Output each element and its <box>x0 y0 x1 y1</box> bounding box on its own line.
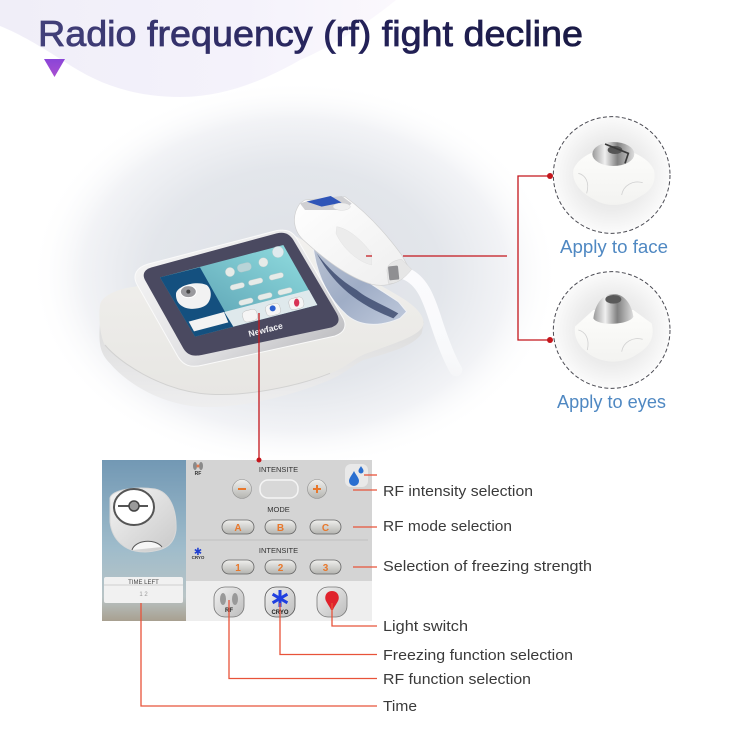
eyes head metal cone <box>593 294 633 324</box>
brand name: Newface <box>247 321 284 339</box>
cable <box>405 273 456 370</box>
leader line: screen to panel <box>258 313 260 460</box>
RF indicator icon <box>193 462 203 477</box>
label: light switch: Light switch <box>383 618 468 635</box>
face head circle <box>553 117 670 233</box>
cradle dark groove <box>317 253 398 318</box>
button: minus <box>232 480 252 498</box>
strength buttons: 2 <box>278 563 284 574</box>
time left box: 1 2 <box>139 592 148 598</box>
heading: intensite: INTENSITE <box>259 465 298 474</box>
button: plus <box>308 480 326 498</box>
panel: eyes head <box>553 272 670 388</box>
strength buttons <box>222 560 341 574</box>
button: RF function <box>214 587 244 617</box>
button: cryo function <box>265 587 295 617</box>
screen buttons <box>225 246 293 306</box>
label: RF intensity selection: RF intensity selection <box>383 483 533 500</box>
connector dot: face head <box>547 173 553 179</box>
heading: mode: MODE <box>267 505 290 514</box>
screen time box <box>189 312 228 331</box>
label: apply to face: Apply to face <box>560 237 668 257</box>
callout labels <box>383 483 592 715</box>
control screen bezel <box>135 230 345 366</box>
red dot on panel <box>256 458 262 462</box>
screen dark frame <box>144 233 339 356</box>
face head metal cap <box>592 142 634 166</box>
RF indicator icon: RF <box>195 471 201 477</box>
mode buttons: B <box>277 523 284 534</box>
screen head image <box>176 283 211 309</box>
face head body <box>573 148 655 205</box>
intensity display <box>260 480 298 498</box>
time left box <box>104 577 183 603</box>
panel: enlarged control screen <box>102 460 372 621</box>
eyes head circle <box>553 272 670 388</box>
background soft device shadow <box>30 80 560 470</box>
mode buttons: A <box>234 523 242 534</box>
screen left image area <box>102 460 186 621</box>
face head seams <box>578 173 643 195</box>
strength buttons: 3 <box>323 563 329 574</box>
label: apply to eyes: Apply to eyes <box>557 392 666 412</box>
cryo indicator icon: ✱ <box>194 547 202 558</box>
docking cradle <box>313 248 407 324</box>
title: Radio frequency (rf) fight decline <box>38 13 583 54</box>
heading: intensite cryo: INTENSITE <box>259 546 298 555</box>
screen right gray controls area <box>186 460 372 581</box>
button: RF function: RF <box>225 608 233 614</box>
device illustration <box>99 196 456 407</box>
eyes head body <box>575 310 653 362</box>
label: freezing function selection: Freezing function selection <box>383 647 573 664</box>
device base tray <box>99 237 424 407</box>
handpiece head image <box>110 488 176 552</box>
background lavender shape <box>0 0 396 97</box>
leader line: handpiece to heads <box>366 176 550 340</box>
handpiece body <box>294 196 412 285</box>
connector dot: eyes head <box>547 337 553 343</box>
strength buttons: 1 <box>235 563 241 574</box>
button: cryo function: CRYO <box>271 610 289 616</box>
label: RF mode selection: RF mode selection <box>383 518 512 535</box>
cryo indicator icon: CRYO <box>192 555 205 560</box>
screen left blue section <box>160 267 233 337</box>
button: light switch <box>317 587 347 617</box>
screen bottom strip <box>224 290 317 327</box>
label: RF function selection: RF function selection <box>383 671 531 688</box>
label: time: Time <box>383 698 417 715</box>
mode buttons: C <box>322 523 329 534</box>
divider <box>190 539 368 541</box>
eyes head seams <box>578 330 643 352</box>
time left box: TIME LEFT <box>128 580 159 586</box>
callout lines <box>141 475 377 706</box>
screen function icons <box>242 296 305 323</box>
icon: purple triangle marker <box>44 59 65 77</box>
screen display <box>160 245 317 337</box>
label: selection of freezing strength: Selection of freezing strength <box>383 558 592 575</box>
mode buttons <box>222 520 341 534</box>
cryo indicator icon <box>192 547 205 560</box>
panel: face head <box>553 117 670 233</box>
icon: water drop button <box>345 464 368 487</box>
screen bottom function strip <box>186 581 372 621</box>
